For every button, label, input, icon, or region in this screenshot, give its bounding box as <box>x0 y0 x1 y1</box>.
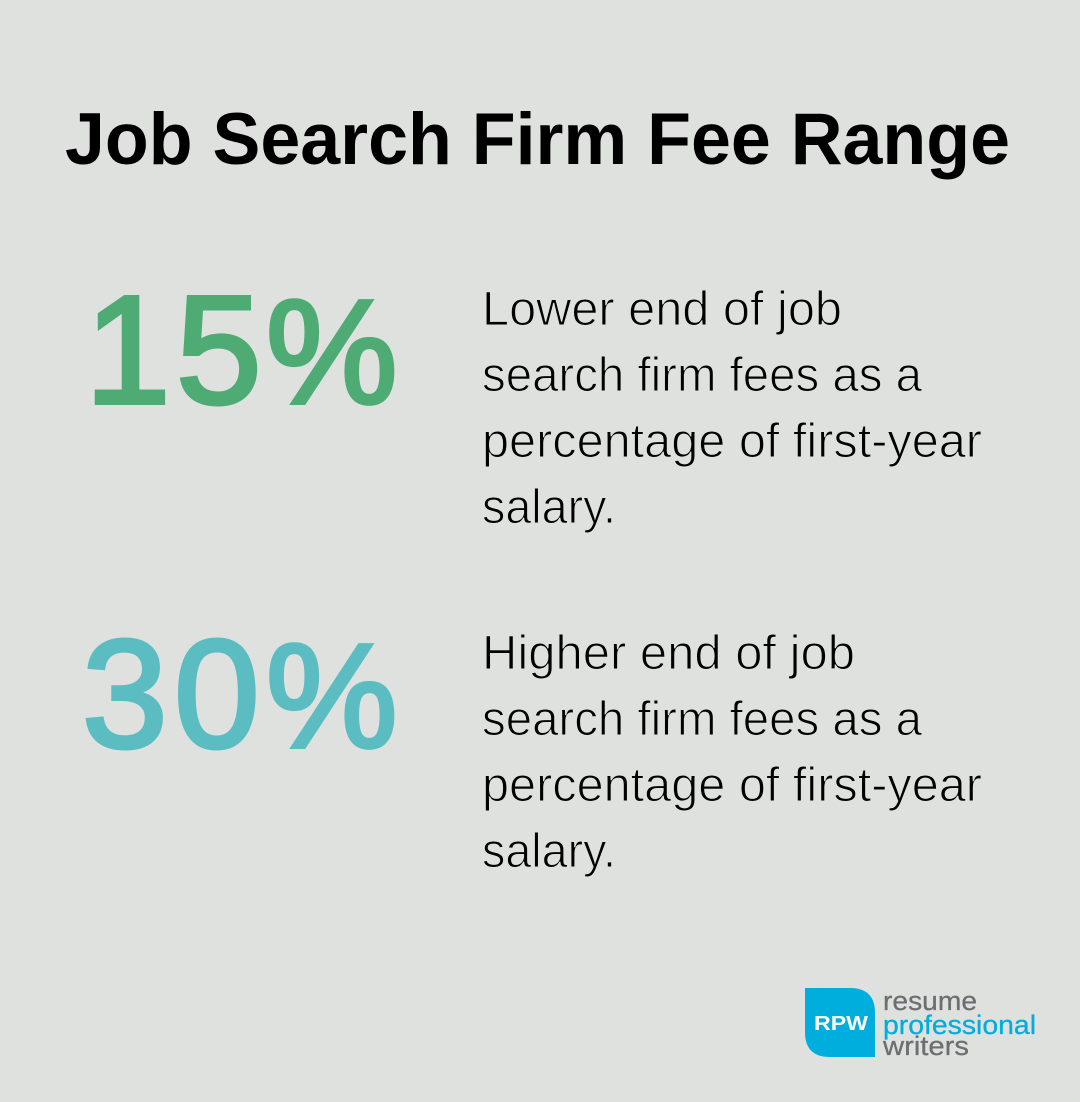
stat number: 15%: % <box>266 270 398 435</box>
description: lower end <box>482 283 982 534</box>
description: lower end: percentage of first-year <box>482 415 982 468</box>
description: lower end: Lower end of job <box>482 283 842 336</box>
description: higher end: Higher end of job <box>482 627 855 680</box>
description: higher end <box>482 627 982 878</box>
logo wordmark: resume <box>883 986 977 1016</box>
logo initials: RPW <box>814 1013 868 1035</box>
logo wordmark <box>882 986 1036 1061</box>
panel: 15% statistic <box>85 264 982 534</box>
stat number: 30%: 0 <box>174 608 260 780</box>
logo wordmark: writers <box>882 1031 969 1061</box>
stat number: 15%: 1 <box>85 264 171 436</box>
description: lower end: salary. <box>482 481 616 534</box>
stat number: 30%: % <box>266 614 398 779</box>
logo: resume professional writers <box>805 986 1036 1061</box>
panel: 30% statistic <box>82 608 982 878</box>
description: lower end: search firm fees as a <box>482 349 922 402</box>
description: higher end: percentage of first-year <box>482 759 982 812</box>
logo wordmark: professional <box>883 1010 1036 1040</box>
stat number: 30%: 3 <box>82 608 168 780</box>
title: Job Search Firm Fee Range <box>65 99 1010 180</box>
stat number: 15%: 5 <box>176 264 262 436</box>
description: higher end: search firm fees as a <box>482 693 922 746</box>
description: higher end: salary. <box>482 825 616 878</box>
icon: RPW badge <box>805 988 875 1057</box>
